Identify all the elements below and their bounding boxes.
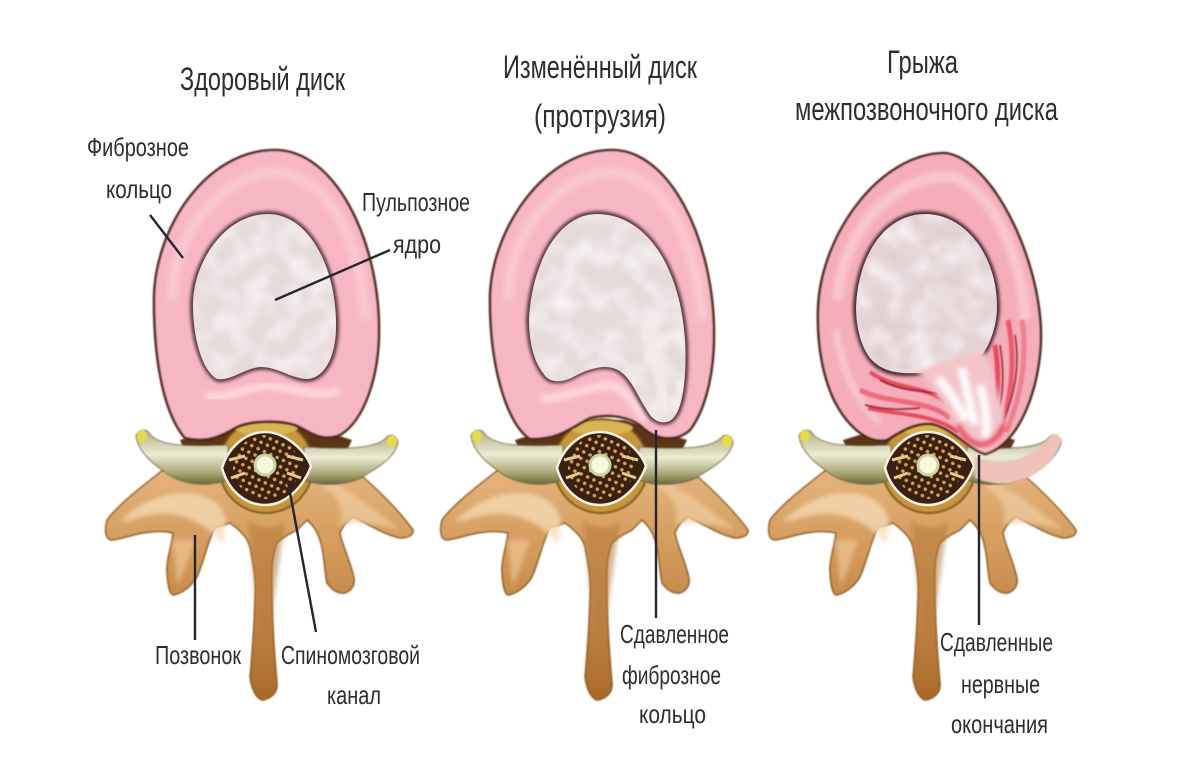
label: compressed nerve endings: Сдавленные — [940, 627, 1053, 657]
vertebra and spinal canal — [106, 419, 413, 700]
label: annulus fibrosus: Фиброзное — [87, 132, 189, 162]
title: changed disc: (протрузия) — [534, 98, 666, 134]
label: compressed annulus: фиброзное — [622, 660, 721, 690]
label: nucleus pulposus: ядро — [393, 229, 441, 259]
title: changed disc — [503, 49, 698, 134]
annulus fibrosus ring — [490, 150, 714, 439]
label: compressed annulus: Сдавленное — [620, 619, 729, 649]
label: spinal canal — [281, 640, 420, 710]
label: compressed annulus: кольцо — [639, 699, 706, 729]
label: spinal canal: Спиномозговой — [281, 640, 420, 670]
nucleus pulposus — [190, 211, 339, 382]
label: spinal canal: канал — [327, 680, 381, 710]
title: healthy disc: Здоровый диск — [180, 61, 346, 97]
annulus fibrosus ring — [154, 150, 379, 440]
annular tear streaks — [860, 320, 1024, 436]
panel: protrusion — [441, 150, 748, 700]
pointer lines — [150, 215, 979, 640]
panel: healthy disc — [106, 150, 413, 700]
nucleus — [853, 211, 1000, 376]
panel: herniated disc — [769, 153, 1076, 700]
bulging nucleus — [526, 211, 689, 425]
label: nucleus pulposus: Пульпозное — [362, 187, 470, 217]
title: herniated disc — [795, 44, 1058, 127]
title: changed disc: Изменённый диск — [503, 49, 698, 85]
label: compressed annulus — [620, 619, 729, 729]
title: herniated disc: межпозвоночного диска — [795, 91, 1058, 127]
extruded nucleus — [915, 352, 1004, 451]
label: compressed nerve endings — [940, 627, 1053, 739]
vertebra and spinal canal — [769, 419, 1076, 700]
vertebra and spinal canal — [441, 419, 748, 700]
label: nucleus pulposus — [362, 187, 470, 259]
title: herniated disc: Грыжа — [887, 44, 958, 80]
deformed annulus ring — [818, 153, 1041, 454]
label: annulus fibrosus: кольцо — [106, 174, 172, 204]
compressed nerve root, pink — [975, 434, 1061, 484]
label: compressed nerve endings: нервные — [961, 669, 1040, 699]
label: vertebra: Позвонок — [155, 640, 241, 670]
label: annulus fibrosus — [87, 132, 189, 204]
label: compressed nerve endings: окончания — [951, 709, 1048, 739]
